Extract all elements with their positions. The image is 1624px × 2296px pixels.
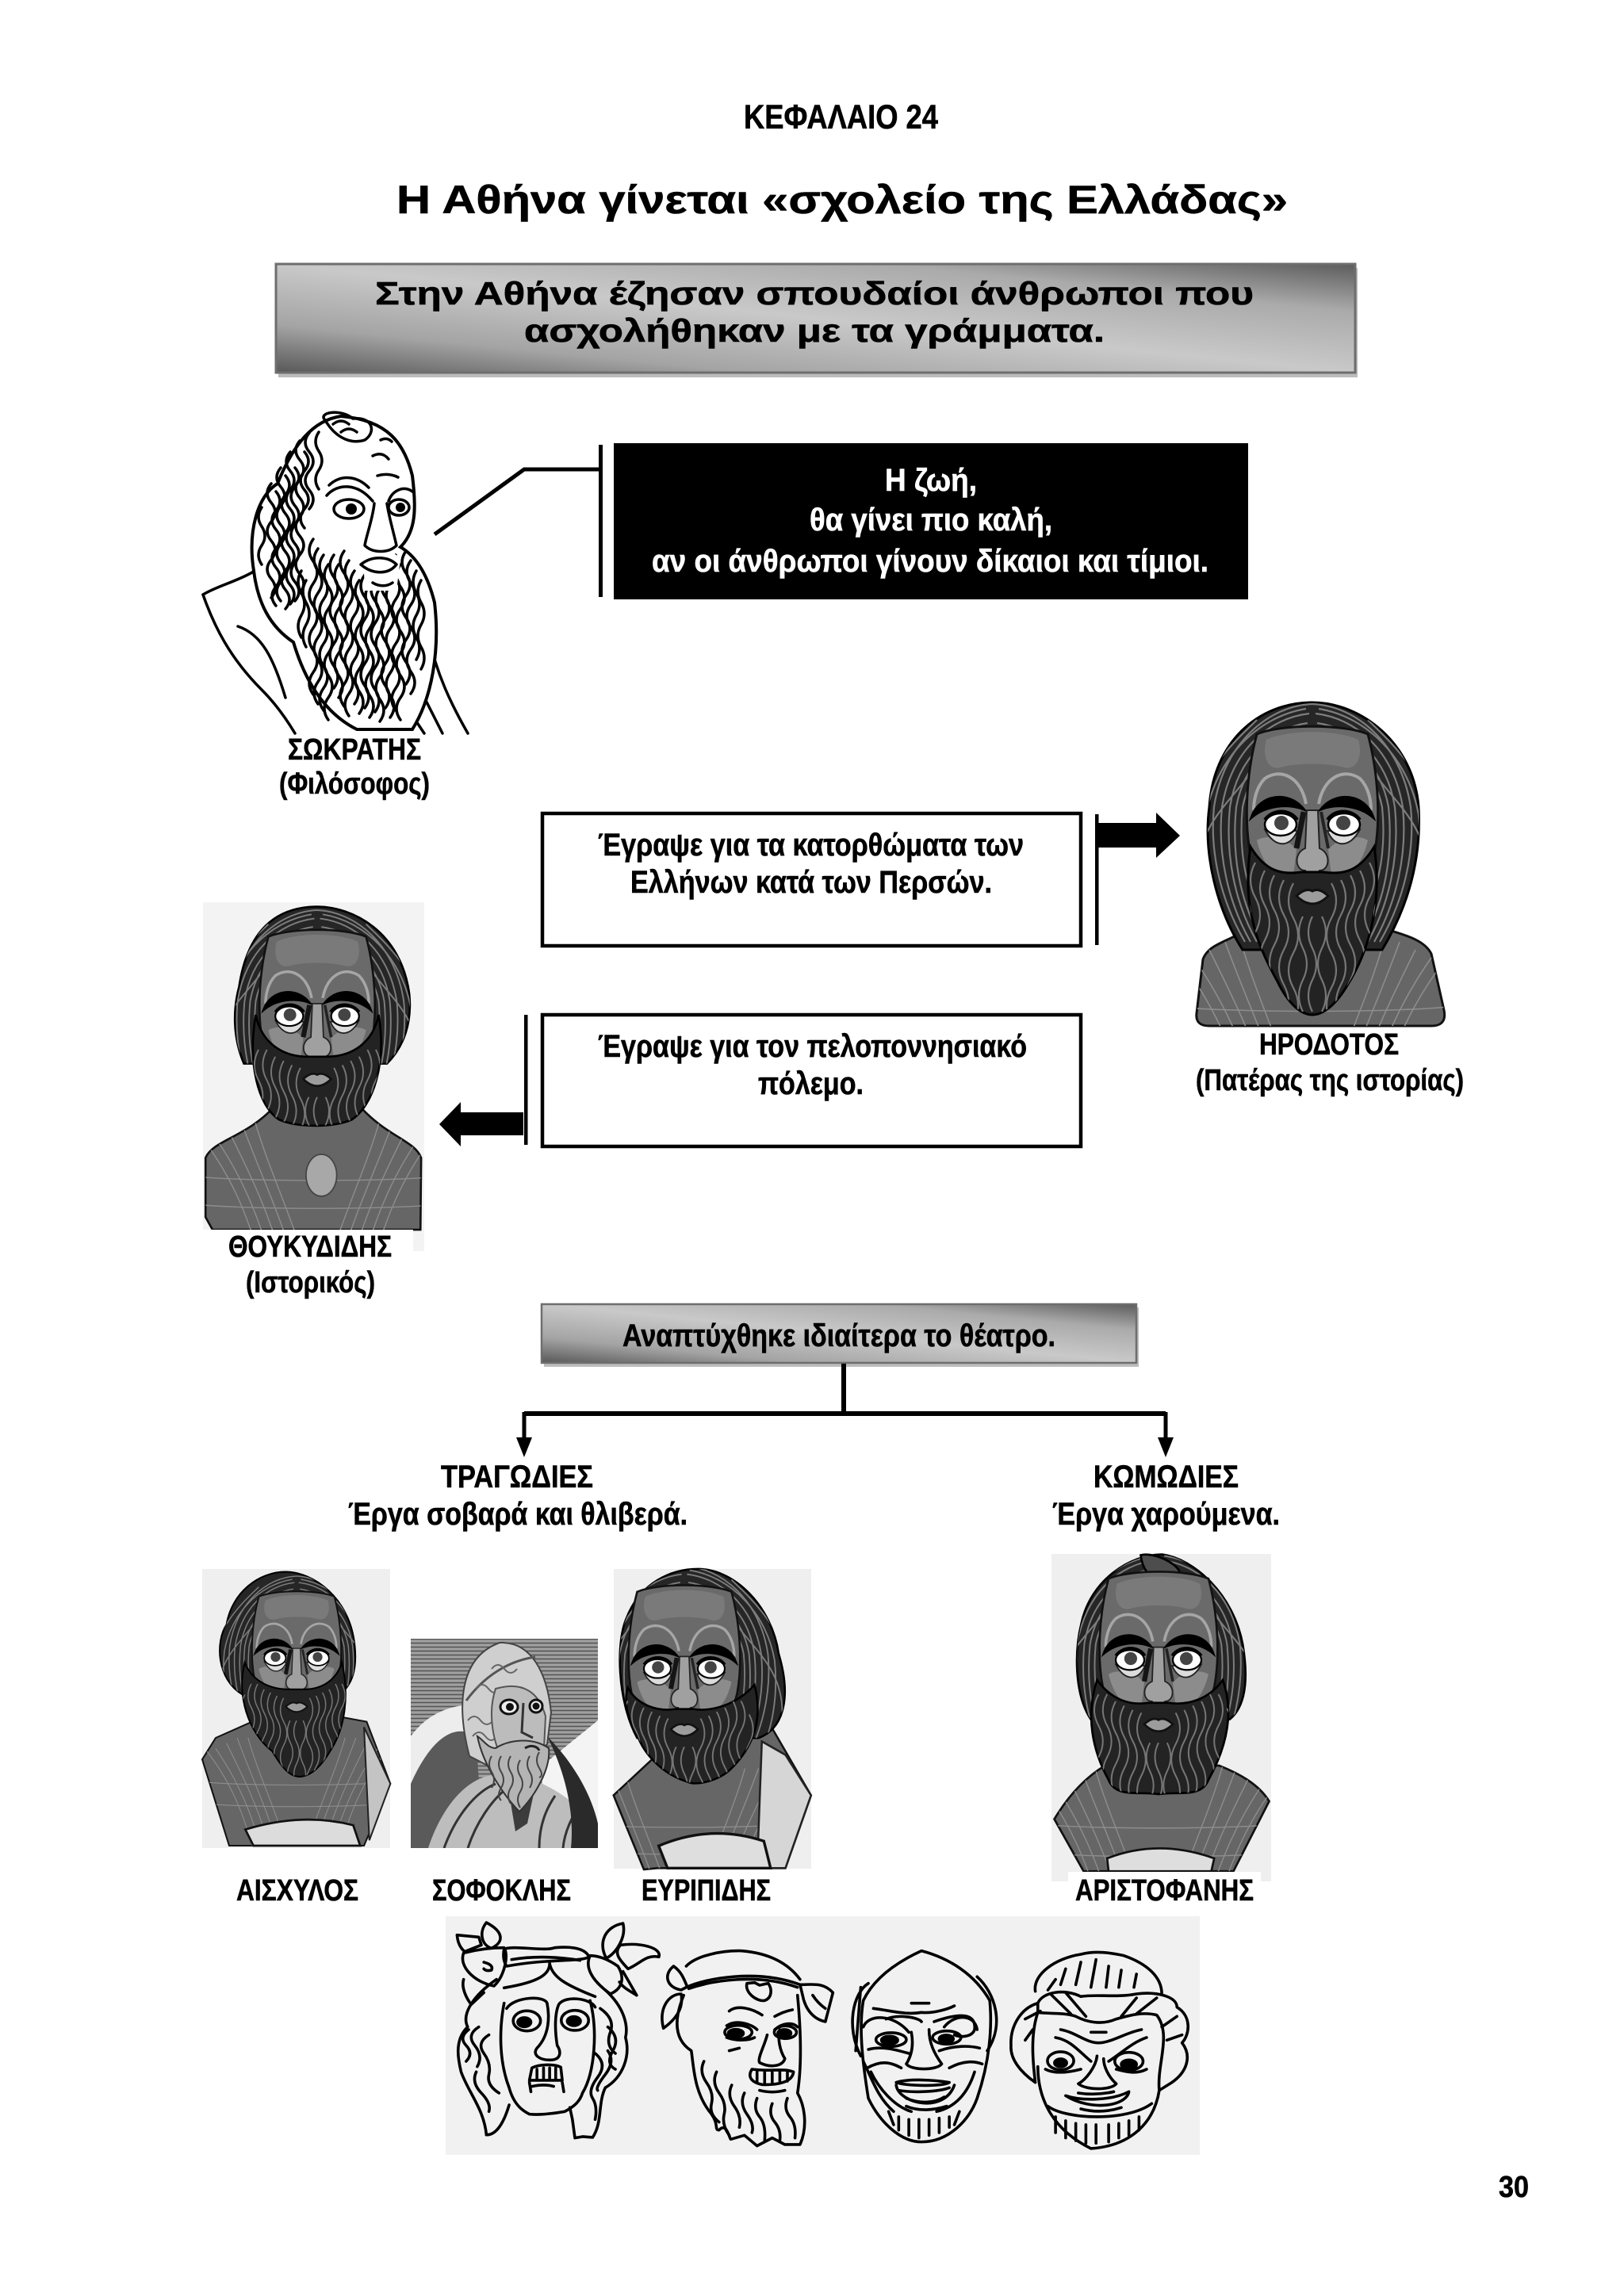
text box: Herodotus — [542, 813, 1081, 946]
labels: playwrights: ΑΙΣΧΥΛΟΣ — [236, 1874, 358, 1908]
label: Thucydides: (Ιστορικός) — [246, 1266, 375, 1299]
heading: tragedies: ΤΡΑΓΩΔΙΕΣ — [441, 1460, 593, 1494]
banner: theatre: Αναπτύχθηκε ιδιαίτερα το θέατρο. — [622, 1318, 1055, 1353]
icon: satyr mask — [662, 1951, 833, 2146]
banner: theatre — [542, 1304, 1139, 1367]
heading: comedies: ΚΩΜΩΔΙΕΣ — [1094, 1460, 1239, 1494]
label: Herodotus: ΗΡΟΔΟΤΟΣ — [1259, 1028, 1399, 1062]
labels: playwrights — [236, 1874, 1254, 1908]
label: Thucydides — [228, 1230, 392, 1299]
icon: curly-haired comic mask — [1011, 1952, 1188, 2149]
text box: Thucydides — [542, 1015, 1081, 1146]
heading: comedies — [1052, 1460, 1280, 1532]
banner: important people — [276, 264, 1358, 377]
panel: theatre masks — [446, 1916, 1200, 2155]
label: Socrates: ΣΩΚΡΑΤΗΣ — [288, 733, 421, 767]
portrait: Thucydides — [203, 902, 424, 1251]
chapter label: ΚΕΦΑΛΑΙΟ 24 — [744, 98, 938, 136]
label: Herodotus: (Πατέρας της ιστορίας) — [1196, 1064, 1464, 1097]
banner: important people: Στην Αθήνα έζησαν σπουδαίοι άνθρωποι που — [375, 275, 1254, 312]
icon: bald comic mask — [852, 1951, 997, 2142]
callout: Socrates saying: αν οι άνθρωποι γίνουν δίκαιοι και τίμιοι. — [652, 544, 1208, 579]
title: Η Αθήνα γίνεται «σχολείο της Ελλάδας» — [396, 178, 1288, 222]
tree connector arrows — [516, 1364, 1174, 1457]
heading: tragedies — [348, 1460, 688, 1532]
labels: playwrights: ΑΡΙΣΤΟΦΑΝΗΣ — [1075, 1874, 1254, 1908]
heading: comedies: Έργα χαρούμενα. — [1052, 1497, 1280, 1532]
callout: Socrates saying — [614, 443, 1248, 599]
icon: tragic mask with leaves — [457, 1923, 659, 2138]
portrait: Socrates — [203, 412, 468, 733]
label: Herodotus — [1196, 1028, 1464, 1097]
text box: Herodotus: Ελλήνων κατά των Περσών. — [630, 865, 992, 900]
banner: important people: ασχολήθηκαν με τα γράμματα. — [524, 312, 1105, 349]
labels: playwrights: ΣΟΦΟΚΛΗΣ — [432, 1874, 571, 1908]
portrait: Sophocles — [411, 1639, 601, 1848]
arrow: to Thucydides — [439, 1015, 528, 1146]
text box: Thucydides: Έγραψε για τον πελοποννησιακό — [598, 1029, 1027, 1064]
speech connector — [435, 445, 603, 597]
portrait: Herodotus — [1195, 701, 1446, 1027]
label: Socrates — [279, 733, 430, 801]
portrait: Aeschylus — [194, 1569, 399, 1851]
callout: Socrates saying: θα γίνει πιο καλή, — [810, 503, 1052, 538]
arrow: to Herodotus — [1095, 813, 1180, 945]
text box: Thucydides: πόλεμο. — [758, 1066, 864, 1101]
text box: Herodotus: Έγραψε για τα κατορθώματα των — [598, 828, 1024, 863]
labels: playwrights: ΕΥΡΙΠΙΔΗΣ — [642, 1874, 771, 1908]
label: Socrates: (Φιλόσοφος) — [279, 767, 430, 801]
page number: 30 — [1499, 2171, 1529, 2204]
heading: tragedies: Έργα σοβαρά και θλιβερά. — [348, 1497, 688, 1532]
callout: Socrates saying: Η ζωή, — [885, 463, 977, 498]
portrait: Aristophanes — [1051, 1553, 1271, 1881]
portrait: Euripides — [612, 1568, 812, 1871]
label: Thucydides: ΘΟΥΚΥΔΙΔΗΣ — [228, 1230, 392, 1264]
